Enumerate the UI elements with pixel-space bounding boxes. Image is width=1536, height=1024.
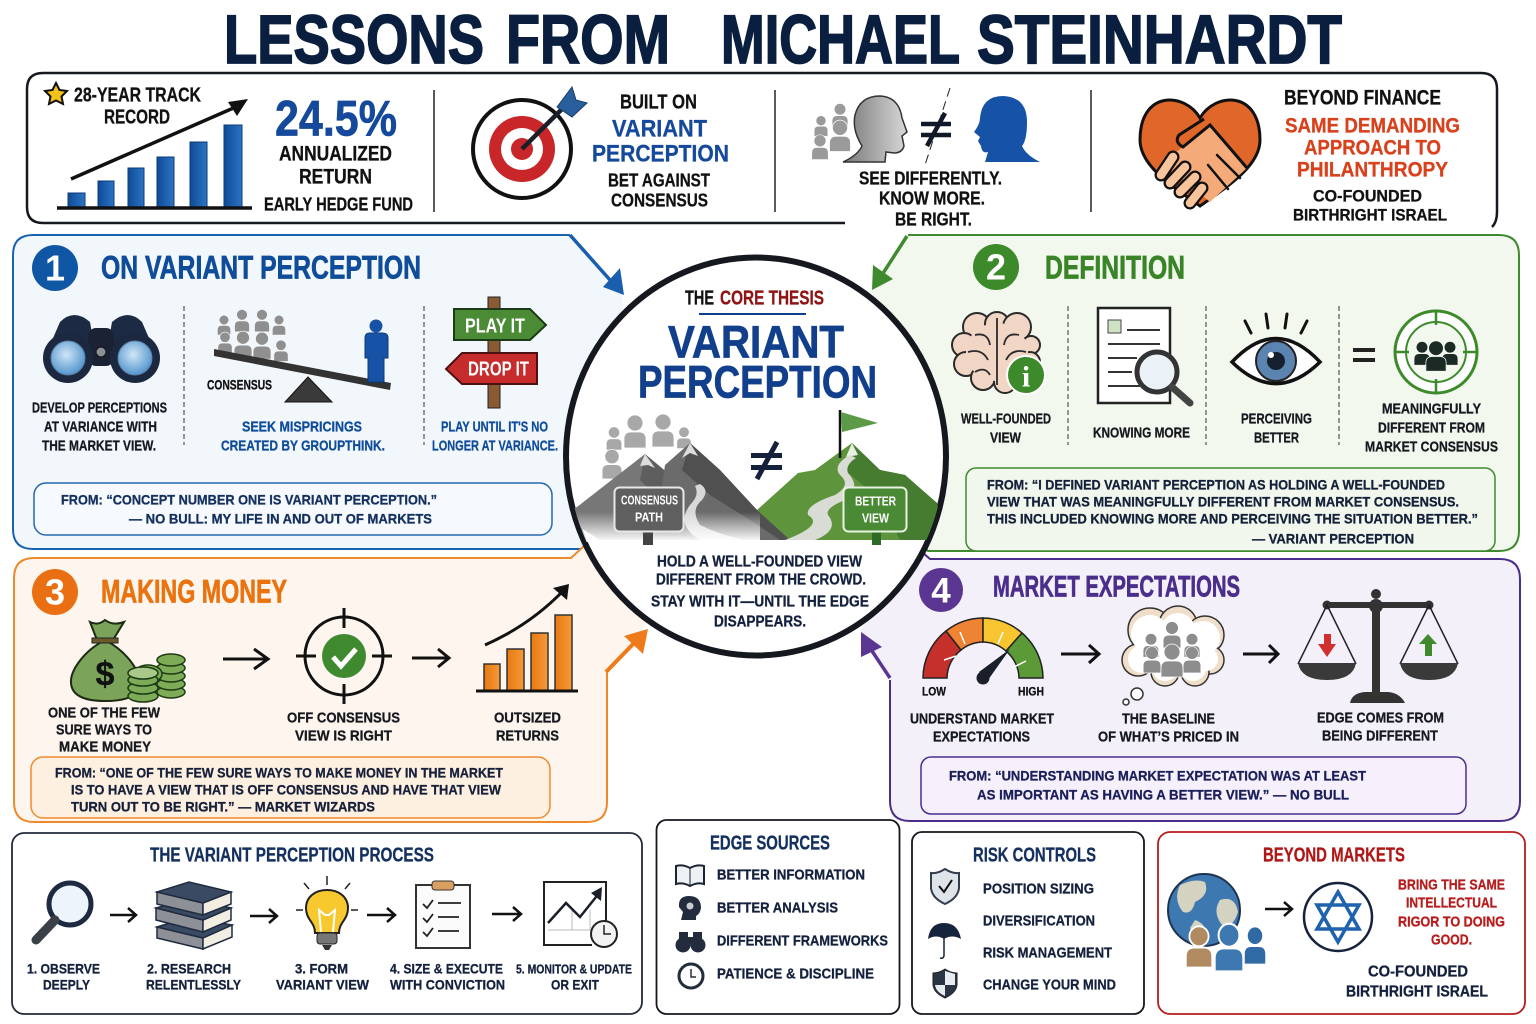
step 2 label: 2. RESEARCH: [147, 960, 231, 976]
title: [224, 1, 1342, 78]
step 4 label: WITH CONVICTION: [390, 976, 505, 992]
panel 2: definition: [870, 235, 1519, 551]
arrow: [412, 649, 449, 667]
text: the baseline: [1098, 710, 1239, 745]
number badge 4: [919, 568, 963, 612]
icon: open book: [676, 865, 704, 886]
icon: clipboard checklist: [416, 881, 470, 948]
text: well-founded view: WELL-FOUNDED: [961, 410, 1051, 427]
panel: edge sources: DIFFERENT FRAMEWORKS: [717, 932, 888, 949]
icon: brain with info: i: [1022, 360, 1030, 393]
text: seek mispricings: CREATED BY GROUPTHINK.: [221, 437, 385, 454]
arrow: orange to center: [606, 629, 648, 672]
text: see differently: SEE DIFFERENTLY.: [859, 168, 1002, 188]
step 1 label: 1. OBSERVE: [27, 960, 100, 976]
panel: risk controls: RISK MANAGEMENT: [983, 944, 1112, 961]
stat: annualized return: ANNUALIZED: [279, 142, 392, 165]
text: one of the few: MAKE MONEY: [59, 738, 151, 755]
arrow: [1243, 645, 1278, 663]
step 2 label: [146, 960, 242, 992]
quote box: IS TO HAVE A VIEW THAT IS OFF CONSENSUS AND HAVE THAT VIEW: [71, 781, 502, 797]
text: thesis statement: [651, 553, 869, 630]
icon: brain with info: [952, 312, 1045, 394]
heading: MAKING MONEY: [101, 573, 287, 609]
title: FROM: [506, 1, 670, 78]
icon: eye: [1232, 314, 1320, 384]
sign: better view: BETTER: [855, 493, 896, 508]
icon: binoculars: [676, 932, 706, 952]
text: built on variant perception: BET AGAINST: [608, 170, 710, 190]
step 3 label: [276, 960, 370, 992]
number badge 1: 1: [45, 247, 65, 288]
text: thesis statement: HOLD A WELL-FOUNDED VIEW: [657, 553, 862, 570]
text: edge comes from: [1317, 709, 1444, 744]
icon: umbrella: [928, 923, 961, 958]
panel: risk controls: DIVERSIFICATION: [983, 912, 1095, 929]
bar chart: growth: [57, 99, 252, 208]
text: well-founded view: [961, 410, 1051, 446]
step 3 label: 3. FORM: [295, 960, 348, 976]
quote box: [966, 468, 1495, 551]
icon: gauge: HIGH: [1018, 684, 1044, 698]
icon: flag: [840, 410, 878, 458]
panel: risk controls: [912, 832, 1144, 1014]
sign: better view: VIEW: [862, 510, 890, 525]
panel 4: market expectations: [860, 552, 1520, 821]
text: built on variant perception: [592, 91, 729, 210]
text: perceiving better: BETTER: [1254, 429, 1299, 446]
quote box: — NO BULL: MY LIFE IN AND OUT OF MARKETS: [129, 510, 432, 526]
step 5 label: OR EXIT: [551, 976, 599, 992]
arrow: [223, 649, 268, 669]
step 5 label: [516, 961, 632, 992]
arrow: [1061, 645, 1099, 663]
sign: consensus path: PATH: [635, 509, 663, 524]
text: bring the same rigor: INTELLECTUAL: [1406, 895, 1497, 911]
panel: edge sources: BETTER ANALYSIS: [717, 899, 838, 916]
icon: chart with clock: [544, 882, 617, 947]
text: play until: LONGER AT VARIANCE.: [432, 437, 558, 454]
text: outsized returns: OUTSIZED: [494, 709, 561, 726]
arrow: [110, 908, 136, 922]
step 4 label: 4. SIZE & EXECUTE: [390, 960, 503, 976]
panel 3: making money: [14, 546, 650, 822]
icon: head: [679, 896, 701, 920]
panel: the variant perception process: [12, 833, 642, 1014]
panel: risk controls: POSITION SIZING: [983, 880, 1094, 897]
panel 1: on variant perception: [13, 235, 622, 549]
stat: annualized return: 24.5%: [275, 90, 397, 146]
icon: seesaw crowd versus individual: [207, 309, 391, 402]
track record label: 28-YEAR TRACK: [74, 84, 201, 106]
text: built on variant perception: PERCEPTION: [592, 140, 729, 167]
text: outsized returns: [494, 709, 561, 744]
icon: thought cloud with crowd: [1122, 606, 1224, 705]
heading: variant perception: PERCEPTION: [638, 356, 877, 407]
icon: shield: [933, 969, 957, 998]
number badge 3: [32, 569, 78, 615]
icon: star of david: [1304, 883, 1372, 951]
quote box: FROM: “UNDERSTANDING MARKET EXPECTATION WAS AT LEAST: [949, 767, 1366, 783]
panel: edge sources: PATIENCE & DISCIPLINE: [717, 965, 874, 982]
icon: heart handshake: [1140, 100, 1260, 206]
icon: clock: [679, 964, 703, 988]
number badge 3: 3: [45, 571, 65, 612]
text: bring the same rigor: GOOD.: [1431, 932, 1472, 948]
equals sign: [1353, 350, 1375, 360]
panel: beyond markets: [1158, 832, 1525, 1014]
text: perceiving better: [1241, 410, 1312, 446]
quote box: — VARIANT PERCEPTION: [1252, 530, 1414, 546]
text: see differently: [859, 168, 1002, 229]
number badge 4: 4: [931, 571, 951, 610]
heading: the core thesis: THE: [685, 287, 714, 309]
sign: better view: [844, 488, 906, 545]
step 1 label: [27, 960, 100, 992]
icon: green target with people: [1395, 311, 1477, 393]
panel: edge sources: BETTER INFORMATION: [717, 866, 865, 883]
heading: MARKET EXPECTATIONS: [993, 570, 1240, 603]
panel: edge sources: [656, 820, 900, 1014]
step 5 label: 5. MONITOR & UPDATE: [516, 961, 632, 976]
text: develop perceptions: DEVELOP PERCEPTIONS: [32, 399, 167, 416]
icon: document and magnifier: [1098, 308, 1190, 403]
text: off consensus: [287, 709, 400, 744]
number badge 2: [973, 244, 1019, 290]
text: co-founded birthright israel: CO-FOUNDED: [1368, 963, 1468, 980]
text: built on variant perception: VARIANT: [612, 115, 707, 142]
text: seek mispricings: SEEK MISPRICINGS: [242, 418, 362, 435]
text: perceiving better: PERCEIVING: [1241, 410, 1312, 427]
icon: magnifier: [36, 883, 91, 940]
text: thesis statement: DIFFERENT FROM THE CROWD.: [656, 571, 866, 588]
quote box: AS IMPORTANT AS HAVING A BETTER VIEW.” — NO BULL: [977, 786, 1349, 802]
arrow: [250, 909, 277, 923]
text: develop perceptions: AT VARIANCE WITH: [44, 418, 157, 435]
stat: annualized return: EARLY HEDGE FUND: [264, 194, 413, 214]
text: thesis statement: STAY WITH IT—UNTIL THE EDGE: [651, 593, 869, 610]
step 4 label: [390, 960, 505, 992]
text: beyond finance: SAME DEMANDING: [1285, 114, 1460, 137]
text: understand market expectations: [910, 710, 1054, 745]
arrow: [367, 908, 395, 922]
heading: variant perception: [638, 316, 877, 407]
title: MICHAEL: [721, 1, 960, 78]
panel: top stats banner: [27, 73, 1497, 229]
illustration: two mountains: [560, 414, 945, 542]
text: meaningfully different: MARKET CONSENSUS: [1365, 438, 1498, 455]
text: play until: PLAY UNTIL IT'S NO: [441, 418, 548, 435]
heading: the core thesis: CORE THESIS: [720, 287, 824, 309]
panel: risk controls: CHANGE YOUR MIND: [983, 976, 1116, 993]
icon: globe with people: [1168, 874, 1266, 972]
icon: stack of books: [156, 882, 232, 949]
heading: RISK CONTROLS: [973, 844, 1096, 866]
icon: seesaw crowd versus individual: CONSENSUS: [207, 376, 272, 392]
stat: annualized return: [264, 90, 413, 214]
text: meaningfully different: MEANINGFULLY: [1382, 400, 1481, 417]
icon: gauge: LOW: [922, 684, 947, 698]
text: see differently: KNOW MORE.: [879, 188, 985, 208]
text: the baseline: THE BASELINE: [1122, 710, 1215, 727]
arrow: [1265, 902, 1292, 916]
quote box: THIS INCLUDED KNOWING MORE AND PERCEIVING THE SITUATION BETTER.”: [987, 510, 1478, 526]
heading: BEYOND MARKETS: [1263, 844, 1405, 866]
text: edge comes from: EDGE COMES FROM: [1317, 709, 1444, 726]
text: beyond finance: BIRTHRIGHT ISRAEL: [1293, 205, 1447, 224]
icon: gauge: [922, 618, 1044, 698]
track record label: RECORD: [104, 106, 170, 128]
text: bring the same rigor: [1398, 877, 1505, 948]
text: bring the same rigor: RIGOR TO DOING: [1398, 914, 1505, 930]
text: beyond finance: [1284, 86, 1460, 224]
heading: ON VARIANT PERCEPTION: [101, 249, 421, 285]
text: beyond finance: PHILANTHROPY: [1297, 158, 1448, 181]
text: outsized returns: RETURNS: [496, 727, 559, 744]
quote box: [31, 757, 550, 818]
text: off consensus: VIEW IS RIGHT: [295, 727, 392, 744]
text: understand market expectations: UNDERSTAND MARKET: [910, 710, 1054, 727]
text: thesis statement: DISAPPEARS.: [714, 613, 806, 630]
icon: balance scale: [1298, 589, 1458, 703]
icon: star: [45, 83, 67, 104]
arrow: [492, 907, 521, 921]
text: see differently: BE RIGHT.: [895, 209, 972, 229]
text: understand market expectations: EXPECTATIONS: [933, 728, 1030, 745]
icon: light bulb: [296, 876, 358, 950]
number badge 2: 2: [986, 246, 1006, 287]
stat: annualized return: RETURN: [299, 165, 372, 188]
bar chart: outsized returns: [476, 584, 578, 691]
number badge 1: [32, 245, 78, 291]
heading: variant perception: VARIANT: [668, 316, 844, 367]
text: co-founded birthright israel: [1346, 963, 1488, 1000]
step 3 label: VARIANT VIEW: [276, 976, 370, 992]
text: knowing more: KNOWING MORE: [1093, 424, 1190, 441]
text: edge comes from: BEING DIFFERENT: [1322, 727, 1438, 744]
text: meaningfully different: [1365, 400, 1498, 455]
heading: the core thesis: [685, 287, 824, 314]
text: beyond finance: CO-FOUNDED: [1313, 186, 1422, 205]
text: well-founded view: VIEW: [990, 429, 1022, 446]
title: STEINHARDT: [977, 1, 1342, 78]
text: develop perceptions: THE MARKET VIEW.: [42, 437, 156, 454]
quote box: VIEW THAT WAS MEANINGFULLY DIFFERENT FROM MARKET CONSENSUS.: [987, 493, 1459, 509]
text: one of the few: SURE WAYS TO: [56, 721, 152, 738]
quote box: FROM: “ONE OF THE FEW SURE WAYS TO MAKE MONEY IN THE MARKET: [55, 764, 503, 780]
panel: core thesis circle: [560, 258, 946, 656]
icon: shield check: [931, 869, 959, 904]
title: LESSONS: [224, 1, 484, 78]
text: built on variant perception: CONSENSUS: [611, 190, 708, 210]
icon: play it / drop it sign: PLAY IT: [465, 315, 525, 337]
heading: DEFINITION: [1045, 249, 1185, 285]
text: develop perceptions: [32, 399, 167, 454]
not equal symbol: [751, 442, 782, 479]
arrow: green to center: [872, 236, 907, 290]
icon: money bag and coins: [71, 620, 185, 702]
quote box: [921, 757, 1466, 814]
quote box: FROM: “CONCEPT NUMBER ONE IS VARIANT PERCEPTION.”: [61, 491, 437, 507]
text: meaningfully different: DIFFERENT FROM: [1378, 419, 1485, 436]
text: one of the few: ONE OF THE FEW: [48, 704, 161, 721]
icon: target with arrow: [473, 87, 587, 198]
quote box: [34, 483, 552, 535]
sign: consensus path: [614, 488, 684, 545]
icon: play it / drop it sign: DROP IT: [468, 358, 529, 380]
text: off consensus: OFF CONSENSUS: [287, 709, 400, 726]
text: built on variant perception: BUILT ON: [620, 91, 697, 113]
text: seek mispricings: [221, 418, 385, 454]
quote box: TURN OUT TO BE RIGHT.” — MARKET WIZARDS: [71, 798, 375, 814]
heading: EDGE SOURCES: [710, 832, 830, 854]
heading: THE VARIANT PERCEPTION PROCESS: [150, 844, 434, 866]
icon: money bag and coins: $: [96, 655, 115, 693]
icon: play it / drop it sign: [446, 297, 546, 408]
arrow: blue to center: [570, 235, 624, 295]
text: the baseline: OF WHAT’S PRICED IN: [1098, 728, 1239, 745]
text: beyond finance: BEYOND FINANCE: [1284, 86, 1441, 109]
quote box: FROM: “I DEFINED VARIANT PERCEPTION AS HOLDING A WELL-FOUNDED: [987, 476, 1445, 492]
step 1 label: DEEPLY: [43, 976, 91, 992]
text: bring the same rigor: BRING THE SAME: [1398, 877, 1505, 893]
text: co-founded birthright israel: BIRTHRIGHT ISRAEL: [1346, 983, 1488, 1000]
icon: crosshair check: [296, 608, 392, 704]
track record label: [74, 84, 201, 128]
icon: crowd versus individual: [812, 88, 1040, 165]
icon: binoculars: [43, 315, 160, 383]
sign: consensus path: CONSENSUS: [621, 492, 678, 507]
text: play until: [432, 418, 558, 454]
text: one of the few: [48, 704, 161, 755]
arrow: purple to center: [861, 632, 890, 678]
step 2 label: RELENTLESSLY: [146, 976, 242, 992]
text: beyond finance: APPROACH TO: [1304, 136, 1441, 159]
